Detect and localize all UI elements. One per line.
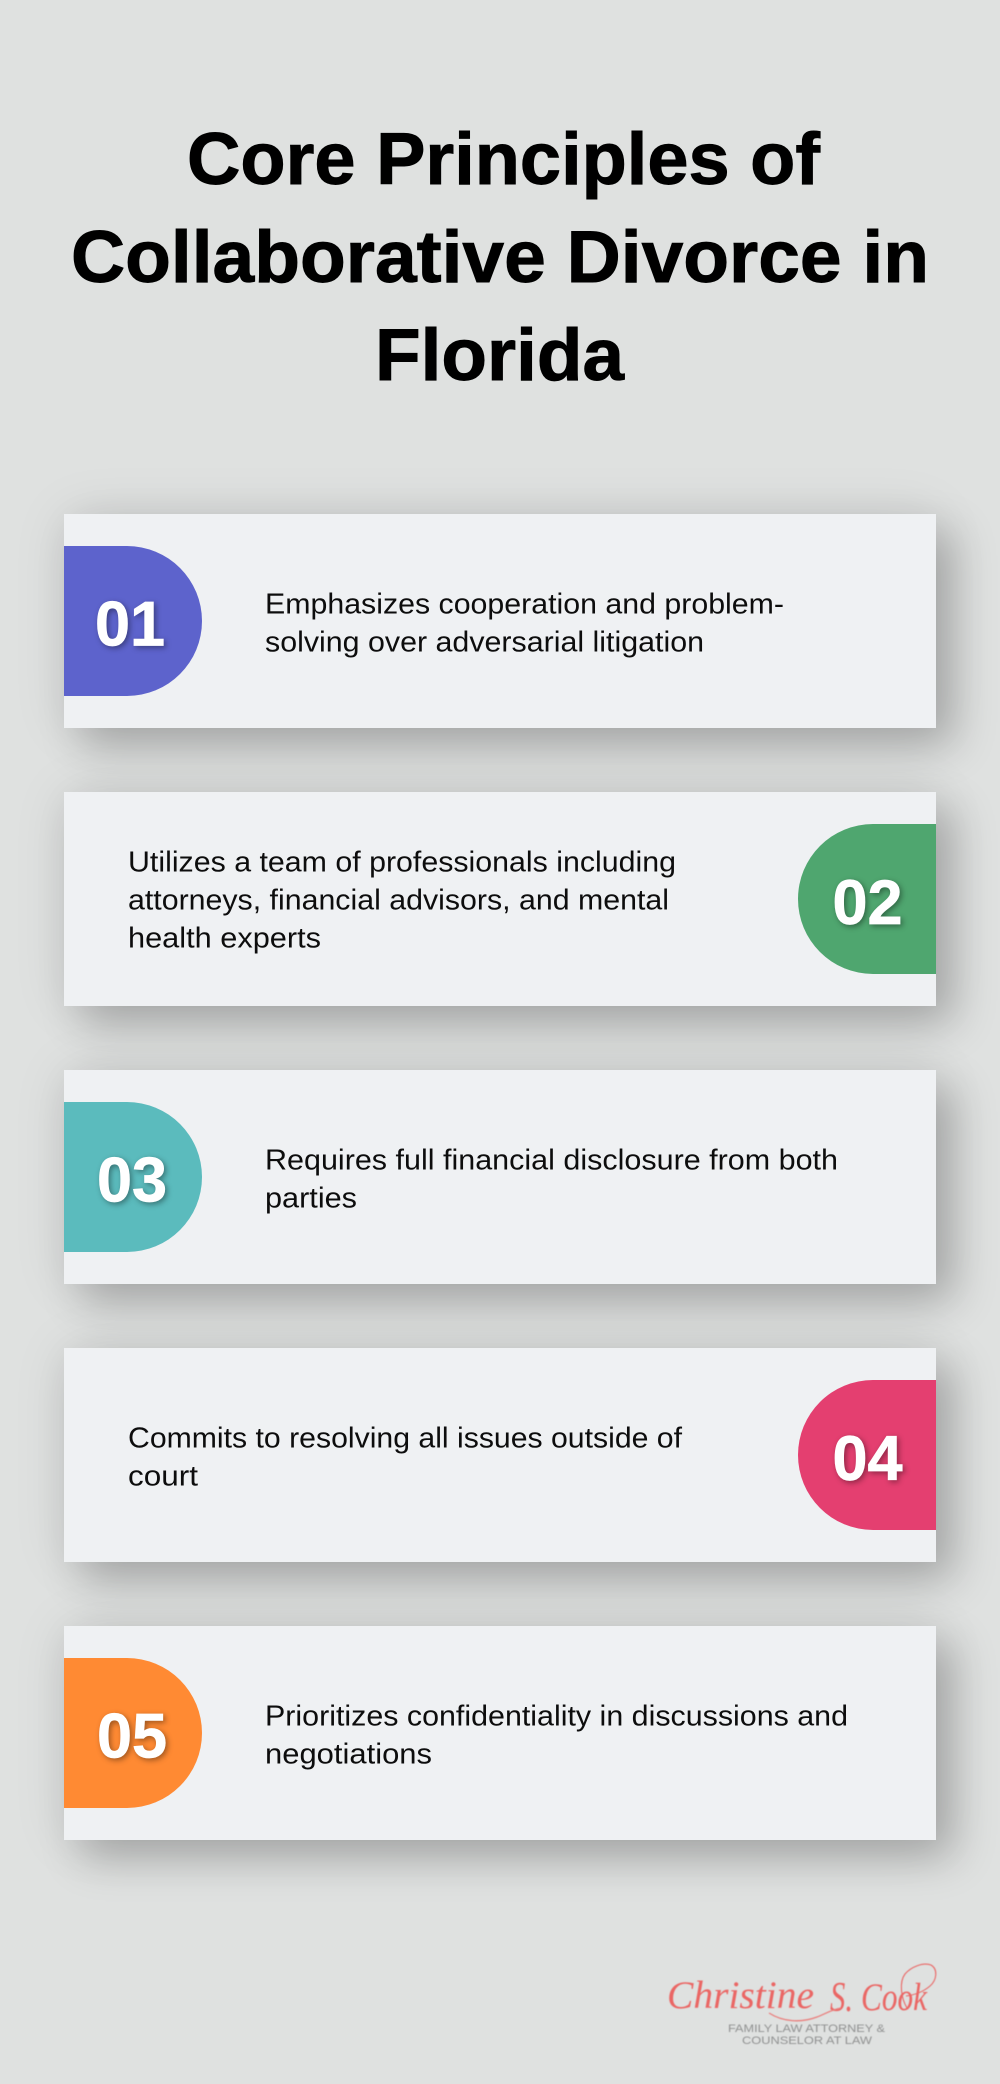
panel: principle 02 [64,792,936,1006]
badge 05: 05 [97,1702,167,1772]
logo: Christine S. Cook [667,1962,937,2047]
badge 03 [64,1102,202,1252]
logo: Christine S. Cook: S. [830,1975,853,2021]
text: principle 03: Requires full financial disclosure from both [265,1144,838,1176]
badge 02 [798,824,936,974]
text: principle 02: Utilizes a team of professionals including [128,846,676,878]
badge 05 [64,1658,202,1808]
badge 02: 02 [832,868,903,938]
text: principle 03: parties [265,1182,357,1214]
title: Core Principles of [187,119,821,200]
badge 03: 03 [97,1146,167,1216]
logo: Christine S. Cook: COUNSELOR AT LAW [742,2035,873,2047]
text: principle 05: negotiations [265,1738,432,1770]
title: Florida [375,315,625,396]
text: principle 02: health experts [128,922,321,954]
badge 04: 04 [832,1424,903,1494]
text: principle 02: attorneys, financial advisors, and mental [128,884,669,916]
text: principle 01: solving over adversarial litigation [265,626,704,658]
text: principle 02 [128,846,676,954]
logo: Christine S. Cook: Cook [861,1976,928,2019]
text: principle 05: Prioritizes confidentiality in discussions and [265,1700,848,1732]
logo: Christine S. Cook: Christine [667,1974,814,2017]
text: principle 04: court [128,1460,198,1492]
title: Collaborative Divorce in [71,217,929,298]
badge 04 [798,1380,936,1530]
text: principle 01 [265,588,784,658]
text: principle 05 [265,1700,848,1770]
panel: principle 03 [64,1070,936,1284]
badge 01: 01 [95,590,165,660]
text: principle 04 [128,1422,682,1492]
text: principle 01: Emphasizes cooperation and problem- [265,588,784,620]
text: principle 03 [265,1144,838,1214]
text: principle 04: Commits to resolving all issues outside of [128,1422,682,1454]
badge 01 [64,546,202,696]
panel: principle 05 [64,1626,936,1840]
panel: principle 01 [64,514,936,728]
title [71,119,929,396]
panel: principle 04 [64,1348,936,1562]
logo: Christine S. Cook: FAMILY LAW ATTORNEY & [728,2023,886,2035]
